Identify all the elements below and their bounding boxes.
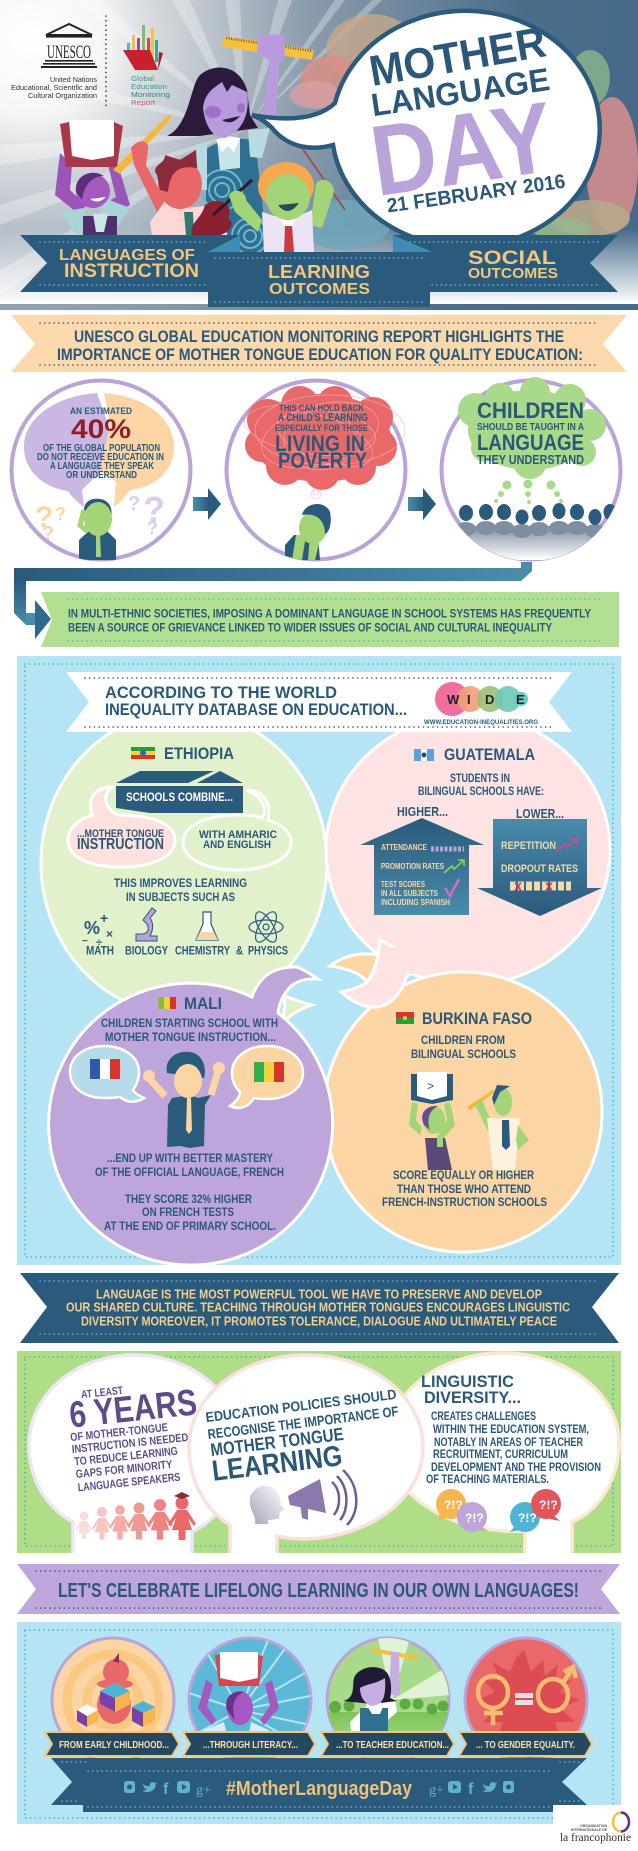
up arrow: higher outcomes: INCLUDING SPANISH: [381, 898, 450, 907]
icons: question bubbles: ?!?: [444, 1498, 463, 1512]
title: [364, 18, 567, 218]
Guatemala intro text: BILINGUAL SCHOOLS HAVE:: [418, 784, 544, 798]
scribbles: [241, 390, 405, 499]
connector arrow: [14, 562, 532, 639]
linguistic diversity text: WITHIN THE EDUCATION SYSTEM,: [433, 1424, 589, 1436]
social icons: [124, 1781, 514, 1798]
linguistic diversity text: DIVERSITY...: [424, 1388, 521, 1407]
thought cloud: [245, 386, 397, 490]
circle: gender equality: [465, 1638, 587, 1765]
subject labels: BIOLOGY: [125, 944, 168, 958]
40 percent statistic: 40%: [71, 414, 131, 444]
up arrow: higher outcomes: TEST SCORES: [381, 880, 426, 889]
speech bubble: [252, 11, 600, 247]
children text: LANGUAGE: [477, 430, 584, 455]
poverty text: THIS CAN HOLD BACK: [279, 403, 364, 414]
flag: Burkina Faso: [396, 1012, 414, 1024]
banner: language is the most powerful tool: DIVERSITY MOREOVER, IT PROMOTES TOLERANCE, DIALOGUE AND ULTIMATELY PEACE: [81, 1314, 557, 1328]
panel: Ethiopia: [41, 711, 327, 1022]
panel: 40 percent circle: [12, 380, 190, 560]
Burkina intro text: [411, 1033, 516, 1061]
circle: teacher education: [326, 1638, 450, 1762]
bubble: Amharic and English: [183, 790, 291, 870]
label ribbon: through literacy: [183, 1732, 315, 1756]
icon: math: −: [82, 936, 88, 947]
child reading: [198, 1652, 279, 1731]
up arrow: higher outcomes: IN ALL SUBJECTS: [381, 889, 439, 898]
title: DAY: [364, 81, 560, 218]
linguistic diversity text: LINGUISTIC: [421, 1372, 514, 1391]
up arrow: higher outcomes: PROMOTION RATES: [381, 862, 445, 871]
question marks: [35, 489, 165, 545]
banner: language is the most powerful tool: LANGUAGE IS THE MOST POWERFUL TOOL WE HAVE TO PRESERVE AND DEVELOP: [96, 1288, 542, 1302]
icon: math: ×: [106, 927, 113, 941]
figures: reading children: >: [427, 1079, 434, 1093]
thought cloud: [458, 377, 606, 504]
UNESCO logo: [41, 24, 97, 68]
Burkina intro text: CHILDREN FROM: [421, 1033, 505, 1047]
banner: report highlights: [11, 315, 627, 372]
40 percent statistic: DO NOT RECEIVE EDUCATION IN: [37, 452, 164, 463]
icon: math: %: [84, 918, 100, 938]
icons: question bubbles: ?!?: [539, 1498, 558, 1512]
bubble: Amharic and English: WITH AMHARIC: [199, 829, 277, 841]
title: LANGUAGE: [369, 61, 552, 123]
panel: Guatemala: GUATEMALA: [444, 745, 535, 764]
40 percent statistic: OF THE GLOBAL POPULATION: [43, 443, 160, 454]
figure: thinking child: [285, 504, 331, 560]
teacher figure: [343, 1648, 418, 1740]
icons: question bubbles: ?!?: [465, 1511, 484, 1525]
WIDE logo: W: [447, 692, 460, 707]
social icons: f: [163, 1781, 169, 1798]
question marks: ?: [143, 489, 165, 530]
question marks: ?: [147, 518, 158, 538]
child with raised arms: [229, 162, 334, 252]
circle: early childhood: [52, 1638, 174, 1762]
panel: Burkina Faso: BURKINA FASO: [422, 1009, 532, 1028]
subject labels: PHYSICS: [248, 944, 288, 958]
icon: math: ÷: [96, 937, 102, 949]
Burkina result text: THAN THOSE WHO ATTEND: [397, 1182, 531, 1196]
Mali result text: ...END UP WITH BETTER MASTERY: [107, 1151, 273, 1165]
Burkina result text: FRENCH-INSTRUCTION SCHOOLS: [382, 1195, 547, 1209]
figures: reading children: [409, 1072, 529, 1170]
Guatemala intro text: STUDENTS IN: [450, 771, 510, 785]
40 percent statistic: [37, 406, 164, 481]
panel: world inequality database: [17, 656, 621, 1265]
up arrow: higher outcomes: [360, 818, 484, 915]
ribbon: learning outcomes: [208, 235, 430, 307]
six years text: INSTRUCTION IS NEEDED: [71, 1432, 189, 1456]
40 percent statistic: OR UNDERSTAND: [66, 470, 137, 481]
ribbon: languages of instruction: INSTRUCTION: [64, 261, 199, 282]
GEM report caption: Global: [131, 74, 154, 83]
down arrow: lower outcomes: REPETITION: [501, 840, 556, 852]
ribbon: languages of instruction: LANGUAGES OF: [59, 247, 195, 264]
bubble: Mali flag: [230, 1046, 303, 1108]
GEM report caption: Education: [131, 82, 167, 91]
icon: growing girls: [76, 1492, 196, 1540]
question marks: ?: [35, 501, 53, 534]
flag: Guatemala: [414, 749, 434, 761]
improves learning text: IN SUBJECTS SUCH AS: [126, 890, 235, 904]
question marks: ?: [128, 493, 140, 515]
banner: report highlights: UNESCO GLOBAL EDUCATION MONITORING REPORT HIGHLIGHTS THE: [74, 328, 564, 346]
linguistic diversity text: [421, 1372, 601, 1486]
school building: SCHOOLS COMBINE...: [126, 790, 233, 804]
francophonie logo: INTERNATIONALE DE: [571, 1828, 608, 1832]
poverty text: ESPECIALLY FOR THOSE: [275, 423, 368, 434]
speech tail: Guatemala: [341, 940, 430, 1007]
Mali intro text: [101, 1016, 278, 1044]
francophonie logo: ORGANISATION: [580, 1824, 607, 1828]
subject labels: &: [236, 944, 243, 958]
subject labels: CHEMISTRY: [175, 944, 230, 958]
pastel shapes behind bubble: [290, 14, 638, 250]
social icons: g+: [196, 1783, 211, 1798]
label ribbon: through literacy: ...THROUGH LITERACY...: [203, 1739, 298, 1751]
linguistic diversity text: DEVELOPMENT AND THE PROVISION: [431, 1462, 601, 1474]
speech tail: Burkina Faso: [330, 954, 378, 982]
down arrow: lower outcomes: [477, 819, 602, 916]
poverty text: A CHILD'S LEARNING: [278, 412, 368, 424]
bubble: linguistic diversity: [404, 1351, 621, 1553]
UNESCO caption: Cultural Organization: [28, 91, 97, 100]
ribbon: social outcomes: OUTCOMES: [468, 265, 558, 282]
crowd: [458, 503, 614, 560]
bubble: mother tongue instruction: [68, 787, 175, 867]
banner: language is the most powerful tool: [20, 1273, 619, 1343]
GEM report logo: [123, 25, 163, 70]
panel: poverty circle: [226, 380, 406, 560]
poverty text: POVERTY: [278, 448, 367, 473]
down arrow: lower outcomes: DROPOUT RATES: [501, 863, 578, 875]
icon: flask: [196, 912, 218, 940]
panel: Burkina Faso: [324, 954, 602, 1252]
panel: Guatemala: [326, 715, 610, 985]
linguistic diversity text: OF TEACHING MATERIALS.: [426, 1474, 549, 1486]
education policies text: LEARNING: [210, 1440, 344, 1488]
icon: atom: [249, 909, 283, 945]
linguistic diversity text: NOTABLY IN AREAS OF TEACHER: [434, 1437, 584, 1449]
six years text: LANGUAGE SPEAKERS: [77, 1472, 181, 1494]
down arrow: lower outcomes: X: [514, 880, 522, 894]
panel: world inequality database banner: ACCORDING TO THE WORLD: [105, 683, 337, 702]
label ribbon: from early childhood: [45, 1732, 179, 1756]
WIDE logo: D: [485, 692, 494, 707]
label ribbon: to gender equality: [459, 1732, 592, 1756]
improves learning text: THIS IMPROVES LEARNING: [114, 876, 247, 890]
six years text: OF MOTHER-TONGUE: [70, 1422, 169, 1444]
Burkina result text: [382, 1168, 547, 1209]
40 percent statistic: AN ESTIMATED: [70, 406, 132, 417]
gender symbols: [478, 1667, 576, 1725]
WIDE logo: [424, 682, 538, 726]
Guatemala intro text: LOWER...: [516, 806, 564, 821]
icon: microscope: [136, 908, 157, 941]
WIDE logo: WWW.EDUCATION-INEQUALITIES.ORG: [424, 719, 538, 726]
ribbon: learning outcomes: LEARNING: [268, 262, 370, 282]
Mali result text: THEY SCORE 32% HIGHER: [125, 1192, 252, 1206]
bubble: mother tongue instruction: INSTRUCTION: [77, 836, 164, 853]
flag: Ethiopia: [131, 747, 155, 759]
icons: question bubbles: ?!?: [518, 1511, 537, 1525]
GEM report caption: Report: [131, 98, 156, 107]
question marks: ?: [42, 523, 54, 545]
francophonie logo: [553, 1805, 638, 1851]
violin: [192, 180, 252, 236]
social icons: g+: [429, 1783, 444, 1798]
GEM report caption: Monitoring: [131, 90, 170, 99]
education policies text: MOTHER TONGUE: [209, 1424, 345, 1460]
flag: Mali: [158, 997, 176, 1009]
poverty text: [275, 403, 368, 473]
banner: multi-ethnic societies: [41, 592, 619, 647]
school building: [116, 771, 243, 813]
40 percent statistic: A LANGUAGE THEY SPEAK: [50, 461, 155, 472]
Burkina intro text: BILINGUAL SCHOOLS: [411, 1047, 516, 1061]
title: 21 FEBRUARY 2016: [386, 171, 567, 217]
children text: [477, 398, 584, 467]
poverty text: LIVING IN: [275, 431, 365, 456]
child with pencil: [113, 114, 228, 236]
ribbon: social outcomes: SOCIAL: [468, 248, 556, 269]
linguistic diversity text: CREATES CHALLENGES: [431, 1411, 536, 1423]
linguistic diversity text: RECRUITMENT, CURRICULUM: [433, 1449, 568, 1461]
GEM report caption: [131, 74, 170, 107]
figure: cheering child: [143, 1052, 225, 1148]
baby with blocks: [77, 1653, 155, 1727]
Mali result text: [95, 1151, 284, 1233]
banner: language is the most powerful tool: OUR SHARED CULTURE. TEACHING THROUGH MOTHER TONGUES ENCOURAGES LINGUISTIC: [66, 1300, 570, 1314]
panel: Ethiopia: ETHIOPIA: [164, 744, 234, 763]
Mali result text: AT THE END OF PRIMARY SCHOOL.: [104, 1219, 276, 1233]
subject labels: [86, 944, 288, 958]
bubble: Amharic and English: AND ENGLISH: [203, 839, 271, 851]
six years text: AT LEAST: [81, 1385, 124, 1401]
UNESCO caption: Educational, Scientific and: [11, 83, 97, 92]
education policies text: EDUCATION POLICIES SHOULD: [205, 1386, 397, 1425]
education policies text: RECOGNISE THE IMPORTANCE OF: [207, 1403, 400, 1442]
UNESCO logo: UNESCO: [47, 42, 91, 63]
children text: THEY UNDERSTAND: [477, 453, 584, 467]
icon: person with megaphone: [250, 1470, 356, 1525]
WIDE logo: E: [516, 692, 525, 707]
arrow: [193, 488, 221, 520]
up arrow: higher outcomes: ATTENDANCE: [381, 843, 428, 852]
panel: Mali: MALI: [184, 994, 222, 1013]
six years text: GAPS FOR MINORITY: [75, 1459, 173, 1481]
circle: literacy: [188, 1636, 312, 1758]
ribbon: languages of instruction: [20, 235, 240, 292]
speech bubbles: [24, 393, 174, 507]
label ribbon: to gender equality: ... TO GENDER EQUALITY.: [476, 1739, 575, 1751]
francophonie logo: la francophonie: [560, 1832, 631, 1844]
question marks: ?: [55, 504, 66, 524]
bubble: mother tongue instruction: ...MOTHER TONGUE: [77, 828, 164, 840]
child with book: [55, 120, 130, 236]
panel: world inequality database banner: [66, 672, 572, 732]
Mali intro text: MOTHER TONGUE INSTRUCTION...: [105, 1030, 276, 1044]
ribbon: learning outcomes: OUTCOMES: [269, 281, 370, 298]
ribbon: social outcomes: [393, 235, 618, 292]
Mali result text: ON FRENCH TESTS: [142, 1205, 234, 1219]
icons: question bubbles: [436, 1489, 561, 1532]
down arrow: lower outcomes: X: [545, 880, 553, 894]
WIDE logo: I: [467, 692, 471, 707]
social icons: f: [468, 1781, 474, 1798]
arrow: [408, 488, 436, 520]
bubble: education policies: [189, 1355, 423, 1565]
hashtag ribbon: #MotherLanguageDay: [226, 1778, 413, 1800]
subject labels: MATH: [86, 944, 114, 958]
bubble: French flag: [70, 1046, 144, 1102]
label ribbon: to teacher education: ...TO TEACHER EDUCATION...: [336, 1739, 449, 1751]
panel: world inequality database banner: INEQUALITY DATABASE ON EDUCATION...: [105, 700, 407, 719]
figure: puzzled child: [79, 499, 116, 560]
UNESCO caption: [11, 75, 97, 100]
six years text: 6 YEARS: [67, 1381, 199, 1436]
education policies text: [206, 1390, 398, 1481]
icon: math: [82, 910, 113, 949]
UNESCO caption: United Nations: [50, 75, 97, 84]
panel: children circle: [440, 377, 622, 560]
children text: CHILDREN: [477, 398, 584, 423]
label ribbon: to teacher education: [321, 1732, 454, 1756]
Guatemala intro text: HIGHER...: [397, 804, 448, 819]
Guatemala intro text: [397, 771, 564, 821]
Mali intro text: CHILDREN STARTING SCHOOL WITH: [101, 1016, 278, 1030]
six years text: [70, 1386, 196, 1492]
bubble: six years: [27, 1353, 216, 1553]
panel: policy speech bubbles: [17, 1351, 621, 1565]
panel: lifelong learning stages: [17, 1622, 621, 1824]
header illustration: [0, 0, 638, 310]
label ribbon: from early childhood: FROM EARLY CHILDHOOD...: [59, 1739, 169, 1751]
hashtag ribbon: [51, 1758, 587, 1812]
title: MOTHER: [366, 18, 549, 96]
children text: SHOULD BE TAUGHT IN A: [477, 422, 584, 433]
icon: math: +: [100, 910, 108, 926]
improves learning text: [114, 876, 247, 904]
six years text: TO REDUCE LEARNING: [74, 1446, 178, 1468]
teacher illustration: [167, 34, 314, 254]
banner: celebrate lifelong learning: [17, 1564, 620, 1614]
Mali result text: OF THE OFFICIAL LANGUAGE, FRENCH: [95, 1165, 284, 1179]
panel: Mali: [49, 967, 333, 1265]
Burkina result text: SCORE EQUALLY OR HIGHER: [393, 1168, 534, 1182]
